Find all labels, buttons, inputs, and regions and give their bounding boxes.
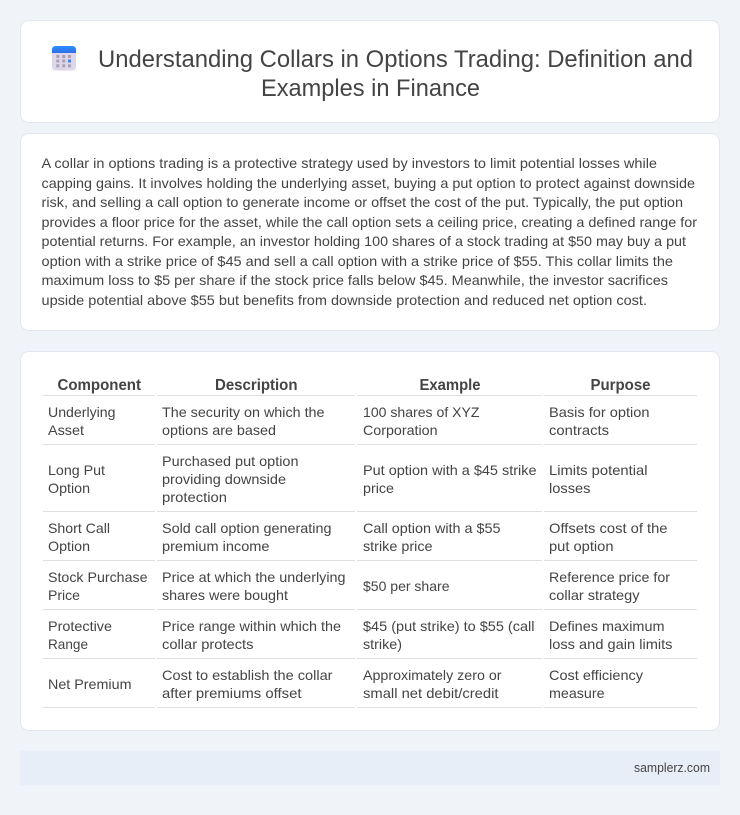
table row: long put option: price: [363, 480, 394, 496]
table header row: Example: [420, 377, 481, 394]
table row: long put option: [48, 453, 648, 505]
text block: collar explanation: maximum loss to $5 per share if the stock price falls below $45. Meanwhile, the investor sacrifices: [42, 272, 668, 288]
footer source text: samplerz.com: [634, 761, 710, 775]
table row: short call option: Option: [48, 538, 90, 554]
table row: protective range: Range: [48, 636, 88, 652]
panel: components table: [20, 352, 720, 730]
text block: collar explanation: [42, 155, 697, 308]
table row: short call option: put option: [549, 538, 614, 554]
table row: stock purchase price: Price at which the underlying: [162, 569, 346, 585]
table row: underlying asset: The security on which the: [162, 404, 325, 420]
table row: underlying asset: contracts: [549, 422, 609, 438]
table row: stock purchase price: Reference price for: [549, 569, 670, 585]
panel: intro paragraph: [20, 134, 720, 330]
icon: calendar: [52, 46, 76, 70]
table row: long put option: providing downside: [162, 471, 286, 487]
table header row: Component: [58, 377, 141, 394]
table row: net premium: after premiums offset: [162, 685, 302, 701]
table row: long put option: protection: [162, 489, 227, 505]
table row: stock purchase price: Stock Purchase: [48, 569, 148, 585]
text block: collar explanation: potential returns. For example, an investor holding 100 shares of a stock trading at $50 may buy a put: [42, 233, 686, 249]
text block: collar explanation: upside potential above $55 but benefits from downside protection and reduced net option cost.: [42, 292, 647, 308]
table row: protective range: strike): [363, 636, 402, 652]
table row: underlying asset: Basis for option: [549, 404, 650, 420]
footer bar: [20, 751, 720, 785]
text block: collar explanation: risk, and selling a call option to generate income or offset the cost of the put. Typically, the put option: [42, 194, 683, 210]
table row: stock purchase price: [48, 569, 670, 603]
table row: long put option: Limits potential: [549, 462, 648, 478]
table row: stock purchase price: collar strategy: [549, 587, 640, 603]
table row: long put option: losses: [549, 480, 590, 496]
table row: short call option: premium income: [162, 538, 270, 554]
table row: stock purchase price: $50 per share: [363, 578, 450, 594]
text block: collar explanation: A collar in options trading is a protective strategy used by investors to limit potential losses while: [42, 155, 657, 171]
table row: short call option: Call option with a $55: [363, 520, 501, 536]
table row: protective range: Defines maximum: [549, 618, 664, 634]
table row: short call option: Sold call option generating: [162, 520, 332, 536]
table row: protective range: Protective: [48, 618, 112, 634]
table row: net premium: Approximately zero or: [363, 667, 502, 683]
table row: net premium: [48, 667, 643, 701]
table row: long put option: Purchased put option: [162, 453, 298, 469]
table row: short call option: strike price: [363, 538, 433, 554]
table row: net premium: measure: [549, 685, 605, 701]
text block: collar explanation: option with a strike price of $45 and sell a call option with a strike price of $55. This collar limits the: [42, 253, 673, 269]
table row: stock purchase price: shares were bought: [162, 587, 288, 603]
table row: underlying asset: Underlying: [48, 404, 116, 420]
table row: net premium: small net debit/credit: [363, 685, 499, 701]
title: Understanding Collars in Options Trading: Definition and: [98, 46, 693, 73]
table row: protective range: loss and gain limits: [549, 636, 672, 652]
table row: net premium: Net Premium: [48, 676, 132, 692]
table row: protective range: collar protects: [162, 636, 254, 652]
title: [98, 46, 693, 102]
table row: long put option: Put option with a $45 strike: [363, 462, 537, 478]
title: Examples in Finance: [261, 75, 480, 102]
table header row: Description: [215, 377, 298, 394]
table row: stock purchase price: Price: [48, 587, 80, 603]
table row: underlying asset: 100 shares of XYZ: [363, 404, 480, 420]
table row: long put option: Option: [48, 480, 90, 496]
table row: underlying asset: [48, 404, 650, 438]
table row: underlying asset: Asset: [48, 422, 84, 438]
table row: protective range: [48, 618, 672, 652]
table row: short call option: Short Call: [48, 520, 110, 536]
text block: collar explanation: provides a floor price for the asset, while the call option sets a ceiling price, creating a defined range for: [42, 214, 697, 230]
table row: short call option: [48, 520, 668, 554]
table header row: Purpose: [590, 377, 651, 394]
table row: underlying asset: options are based: [162, 422, 276, 438]
table row: protective range: Price range within which the: [162, 618, 341, 634]
table row: net premium: Cost efficiency: [549, 667, 643, 683]
panel: title card: [20, 20, 720, 122]
text block: collar explanation: capping gains. It involves holding the underlying asset, buying a put option to protect against downside: [42, 175, 695, 191]
table row: underlying asset: Corporation: [363, 422, 438, 438]
table header row: [58, 377, 651, 394]
table row: protective range: $45 (put strike) to $55 (call: [363, 618, 534, 634]
table row: net premium: Cost to establish the collar: [162, 667, 333, 683]
table row: long put option: Long Put: [48, 462, 105, 478]
table row: short call option: Offsets cost of the: [549, 520, 668, 536]
